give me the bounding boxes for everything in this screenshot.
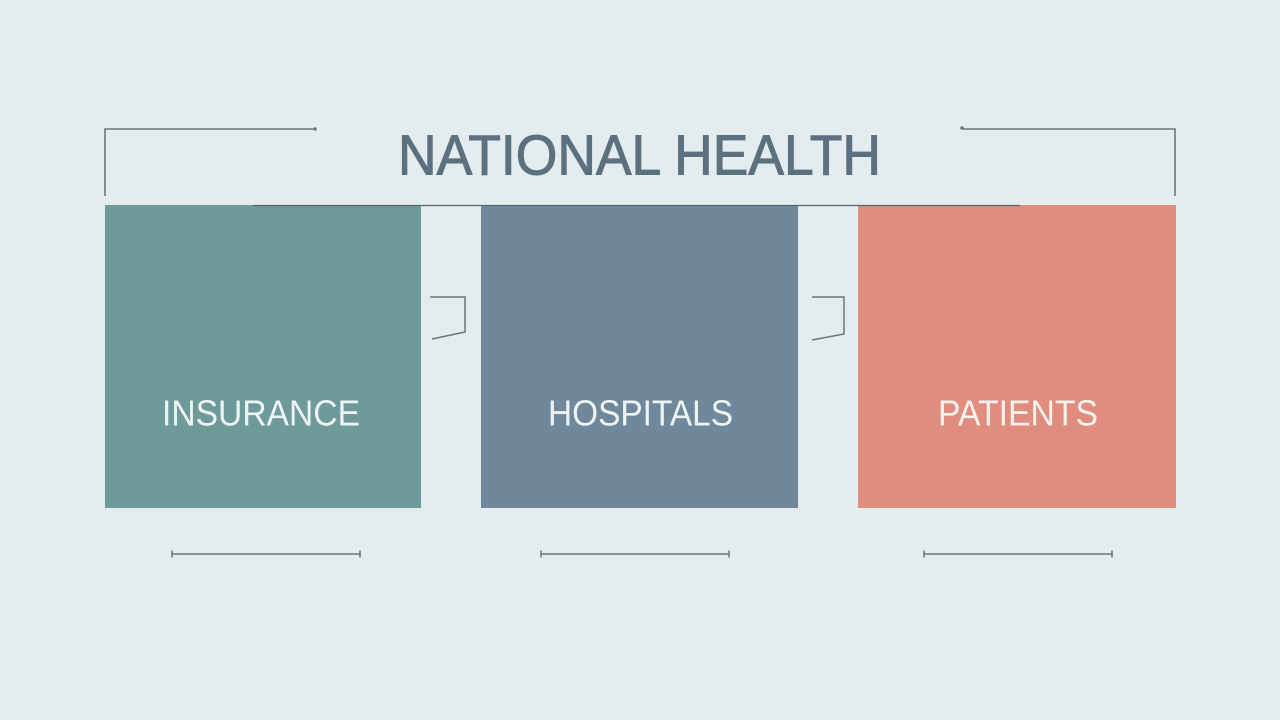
underline: patients bbox=[924, 550, 1112, 558]
top-right bracket bbox=[961, 127, 1175, 196]
title: NATIONAL HEALTH bbox=[398, 124, 881, 188]
panel: patients bbox=[858, 205, 1176, 508]
top-left bracket bbox=[105, 128, 316, 196]
connector: insurance to hospitals bbox=[430, 297, 465, 339]
label: insurance: INSURANCE bbox=[162, 392, 360, 434]
panel: insurance bbox=[105, 205, 421, 508]
label: hospitals: HOSPITALS bbox=[548, 392, 733, 434]
connector: hospitals to patients bbox=[812, 297, 844, 340]
top rule across panels bbox=[253, 204, 1020, 206]
panel: hospitals bbox=[481, 205, 798, 508]
label: patients: PATIENTS bbox=[938, 392, 1098, 434]
underline: hospitals bbox=[541, 550, 729, 558]
underline: insurance bbox=[172, 550, 360, 558]
